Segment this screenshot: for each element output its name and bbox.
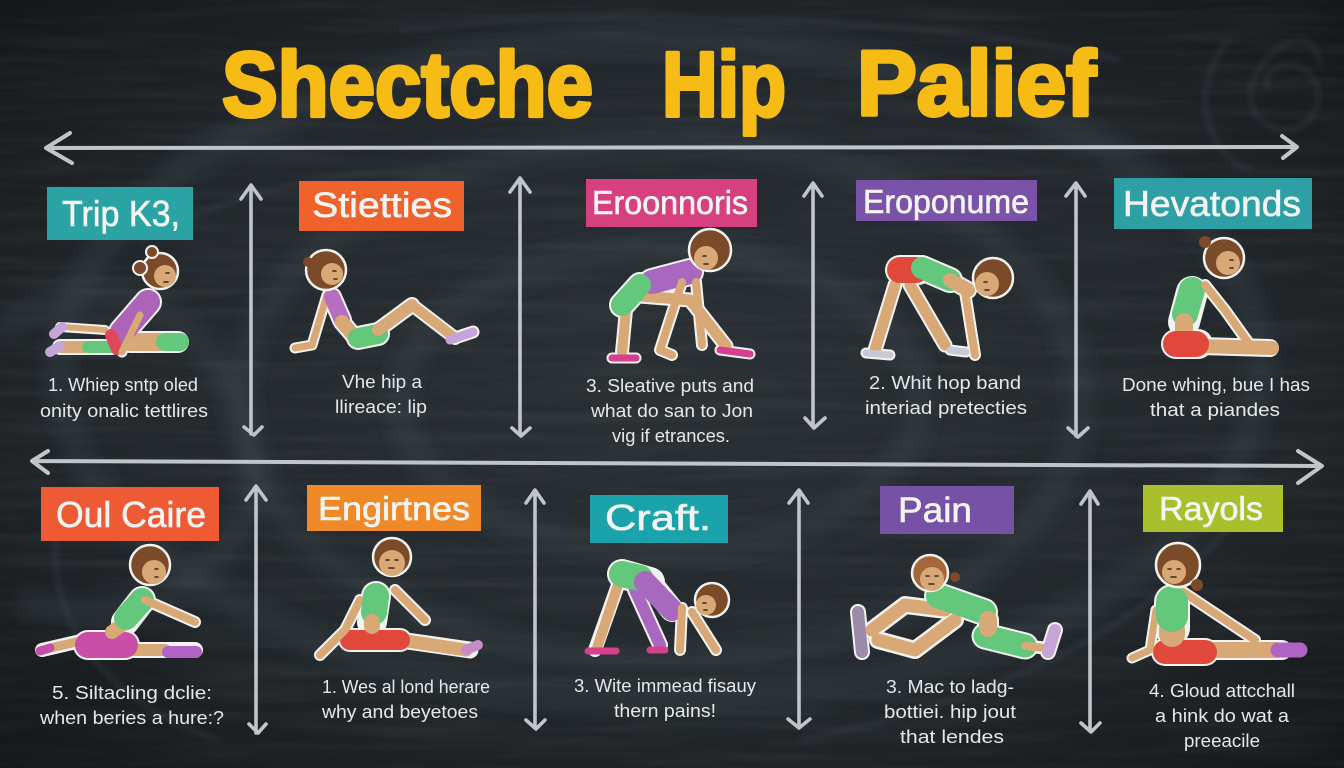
title: Palief — [857, 33, 1096, 135]
text block: a hink do wat a — [1155, 706, 1290, 726]
text block: Done whing, bue I has — [1122, 375, 1310, 395]
title: Hip — [662, 34, 786, 136]
text block: what do san to Jon — [590, 401, 753, 421]
text block — [39, 683, 224, 728]
panel: step 4 — [856, 180, 1037, 418]
text block: 4. Gloud attcchall — [1149, 681, 1295, 701]
text block — [586, 376, 754, 446]
heading: Hevatonds — [1114, 178, 1312, 229]
arrow: vertical 1 — [241, 185, 262, 435]
heading: Hevatonds: Hevatonds — [1123, 183, 1301, 224]
text block: 2. Whit hop band — [869, 373, 1021, 393]
heading: Pain — [880, 486, 1014, 534]
text block: that lendes — [900, 727, 1004, 747]
text block: when beries a hure:? — [39, 708, 224, 728]
panel: step 6 — [39, 487, 224, 728]
panel: step 5 — [1114, 178, 1312, 420]
figure: seated twist — [50, 246, 180, 352]
arrow: vertical 8 — [1081, 491, 1100, 732]
panel: step 2 — [295, 181, 473, 417]
text block: 1. Whiep sntp oled — [48, 375, 198, 395]
arrow: vertical 3 — [804, 183, 825, 428]
text block: onity onalic tettlires — [40, 401, 208, 421]
text block — [865, 373, 1027, 418]
arrow: vertical 5 — [246, 486, 266, 733]
heading: Rayols: Rayols — [1159, 490, 1263, 527]
text block: bottiei. hip jout — [884, 702, 1016, 722]
text block: interiad pretecties — [865, 398, 1027, 418]
heading: Craft. — [590, 495, 728, 543]
text block: why and beyetoes — [321, 702, 478, 722]
text block: that a piandes — [1150, 400, 1280, 420]
text block — [1149, 681, 1295, 751]
text block — [574, 676, 756, 721]
panel: step 8 — [574, 495, 756, 721]
heading: Craft.: Craft. — [605, 497, 711, 538]
text block: preeacile — [1184, 731, 1260, 751]
text block — [884, 677, 1016, 747]
heading: Pain: Pain — [898, 491, 972, 530]
text block: thern pains! — [614, 701, 716, 721]
panel: step 7 — [307, 485, 490, 722]
figure: seated forward reach — [1176, 236, 1272, 348]
arrow: vertical 6 — [526, 490, 545, 729]
text block — [321, 677, 490, 722]
figure: seated toe touch — [858, 555, 1055, 652]
heading: Engirtnes: Engirtnes — [318, 490, 470, 527]
heading: Stietties: Stietties — [312, 186, 452, 225]
heading: Stietties — [299, 181, 464, 231]
arrow: vertical 4 — [1066, 183, 1088, 437]
title: Shectche — [222, 34, 593, 136]
text block: Vhe hip a — [342, 372, 423, 392]
text block: 5. Siltacling dclie: — [52, 683, 212, 703]
text block: 3. Sleative puts and — [586, 376, 754, 396]
text block: 3. Mac to ladg- — [886, 677, 1014, 697]
heading: Eroponume: Eroponume — [863, 183, 1029, 220]
heading: Trip K3, — [47, 187, 193, 240]
text block: 3. Wite immead fisauy — [574, 676, 756, 696]
panel: step 9 — [858, 486, 1055, 747]
arrow: vertical 7 — [788, 490, 810, 728]
text block — [335, 372, 427, 417]
text block: llireace: lip — [335, 397, 427, 417]
heading: Trip K3,: Trip K3, — [62, 193, 180, 234]
figure: reclined knee bend — [295, 250, 473, 348]
panel: step 3 — [586, 179, 757, 446]
text block: 1. Wes al lond herare — [322, 677, 490, 697]
text block — [1122, 375, 1310, 420]
panel: step 10 — [1132, 485, 1300, 751]
figure: seated side stretch — [40, 545, 196, 652]
figure: seated leg extension — [320, 538, 478, 655]
heading: Oul Caire: Oul Caire — [56, 494, 206, 535]
arrow: vertical 2 — [510, 178, 530, 436]
figure: bent forward fold — [588, 574, 729, 651]
figure: downward dog — [866, 258, 1013, 355]
heading: Rayols — [1143, 485, 1283, 532]
title — [222, 33, 1096, 136]
figure: seated lean back — [1132, 543, 1300, 658]
heading: Engirtnes — [307, 485, 481, 531]
arrow: top horizontal — [46, 133, 1297, 163]
heading: Oul Caire — [41, 487, 219, 541]
text block: vig if etrances. — [612, 426, 730, 446]
heading: Eroonnoris: Eroonnoris — [592, 184, 748, 221]
panel: step 1 — [40, 187, 208, 421]
figure: deep lunge — [612, 229, 750, 358]
arrow: middle horizontal — [32, 451, 1322, 483]
text block — [40, 375, 208, 421]
